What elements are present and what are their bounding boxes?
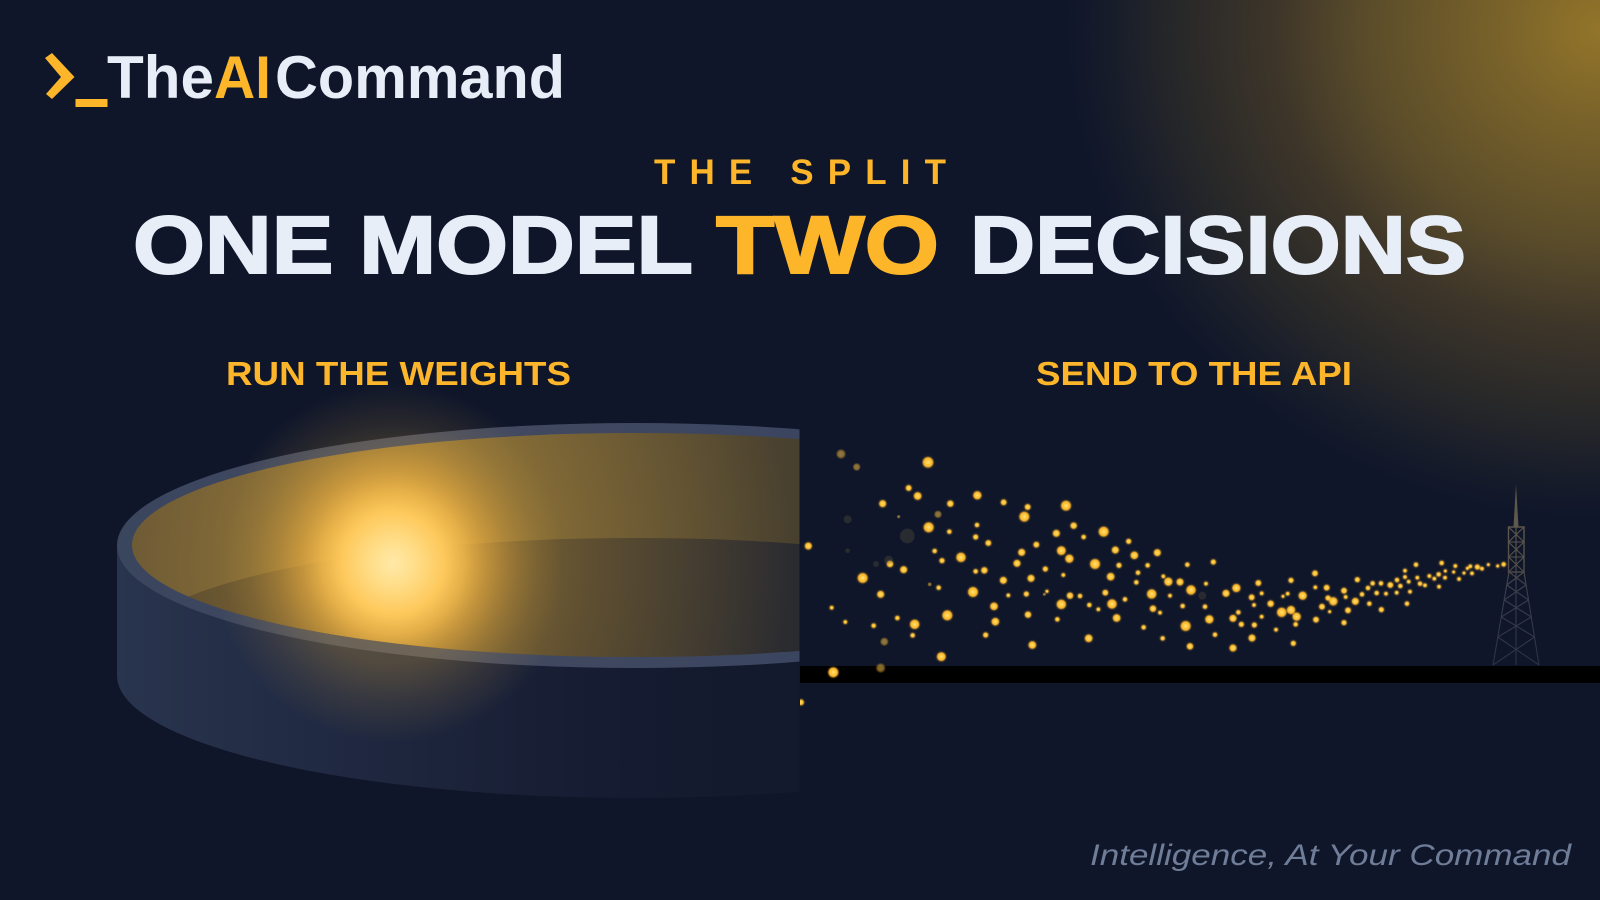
heading: run the weights: RUN THE WEIGHTS xyxy=(226,356,571,393)
interior light spread xyxy=(132,433,751,657)
interior wall xyxy=(120,430,800,660)
eyebrow: the split: THE SPLIT xyxy=(654,153,946,192)
disc rim xyxy=(117,423,800,668)
title: DECISIONS xyxy=(970,200,1466,291)
title: ONE MODEL xyxy=(133,200,693,291)
title: TWO xyxy=(716,200,939,291)
heading: send to the API: SEND TO THE API xyxy=(1036,356,1352,393)
logo wordmark: Command xyxy=(275,44,565,111)
light on rim, wall and backdrop xyxy=(240,397,526,728)
tagline: Intelligence, At Your Command xyxy=(1090,839,1573,872)
icon: terminal prompt xyxy=(45,53,108,107)
particles: left cluster xyxy=(798,457,1214,705)
icon: transmission tower xyxy=(1493,484,1539,665)
particle stream xyxy=(798,449,1506,705)
logo wordmark: AI xyxy=(214,44,271,111)
particles: narrowing stream toward tower xyxy=(1211,559,1506,652)
interior floor xyxy=(188,538,800,657)
particles: faint out-of-focus xyxy=(844,515,1206,600)
logo wordmark: The xyxy=(107,44,214,111)
corner glow xyxy=(1000,0,1600,540)
glowing core xyxy=(244,440,544,654)
ground bar xyxy=(800,666,1600,683)
disc interior xyxy=(132,433,800,657)
particles: dim out-of-focus xyxy=(836,449,1046,673)
logo xyxy=(45,44,565,111)
disc outer wall xyxy=(117,548,594,798)
panel: glowing disc xyxy=(117,397,800,798)
